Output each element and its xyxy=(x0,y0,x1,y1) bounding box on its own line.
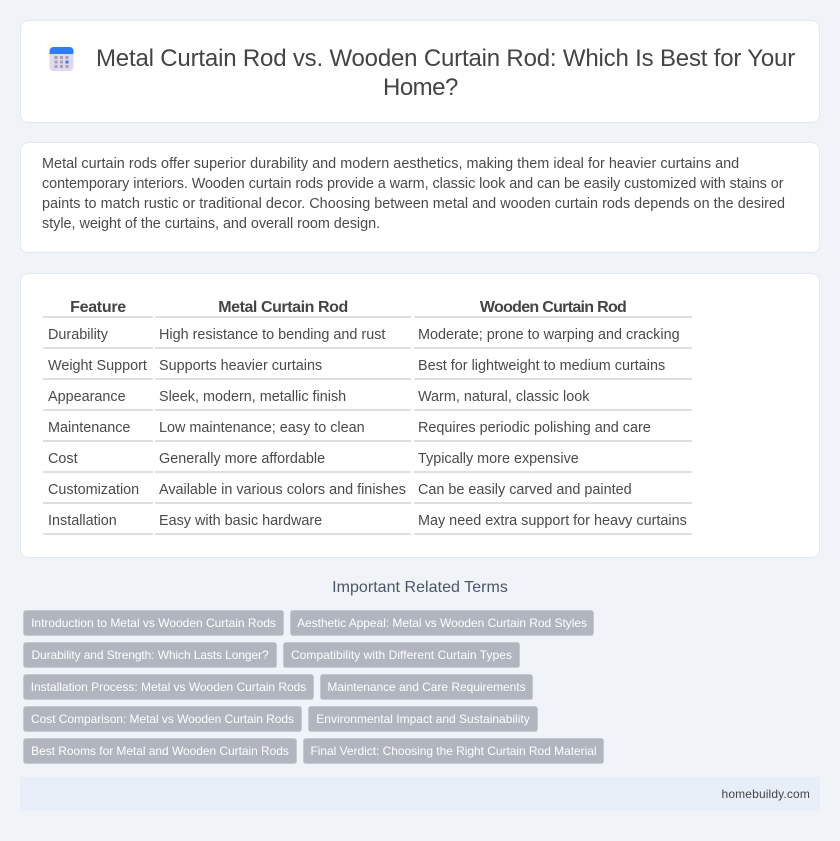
intro text xyxy=(42,156,785,232)
tag: Compatibility with Different Curtain Types xyxy=(291,648,512,662)
tag xyxy=(320,674,533,700)
tag: Installation Process: Metal vs Wooden Curtain Rods xyxy=(31,680,306,694)
intro text: Metal curtain rods offer superior durability and modern aesthetics, making them ideal for heavier curtains and xyxy=(42,156,739,172)
row: maintenance: Low maintenance; easy to clean xyxy=(159,420,365,436)
title: Home? xyxy=(383,74,458,101)
tag xyxy=(290,610,594,636)
tag xyxy=(23,610,284,636)
table header row: Metal Curtain Rod xyxy=(218,299,348,316)
row: customization: Customization xyxy=(48,482,139,498)
tag xyxy=(23,706,302,732)
icon: calendar grid xyxy=(50,47,74,71)
row: durability: Moderate; prone to warping and cracking xyxy=(418,327,680,343)
row: weight support: Supports heavier curtains xyxy=(159,358,322,374)
tag xyxy=(23,642,277,668)
row: customization: Can be easily carved and painted xyxy=(418,482,632,498)
row: weight support: Best for lightweight to medium curtains xyxy=(418,358,665,374)
footer bar xyxy=(20,777,820,811)
tag: Best Rooms for Metal and Wooden Curtain Rods xyxy=(31,744,289,758)
row: cost xyxy=(48,451,579,467)
panel: title header xyxy=(20,20,820,123)
row: maintenance xyxy=(48,420,651,436)
title: Metal Curtain Rod vs. Wooden Curtain Rod: Which Is Best for Your xyxy=(96,45,795,72)
row: cost: Cost xyxy=(48,451,78,467)
tag xyxy=(283,642,520,668)
table header row: Wooden Curtain Rod xyxy=(480,299,626,316)
row: appearance xyxy=(48,389,590,405)
row: durability: Durability xyxy=(48,327,108,343)
row: installation xyxy=(48,513,687,529)
row: appearance: Warm, natural, classic look xyxy=(418,389,589,405)
panel: comparison table xyxy=(20,273,820,558)
heading: important related terms: Important Related Terms xyxy=(332,579,508,596)
row: customization: Available in various colors and finishes xyxy=(159,482,406,498)
row: maintenance: Requires periodic polishing and care xyxy=(418,420,651,436)
row: maintenance: Maintenance xyxy=(48,420,130,436)
tag: Aesthetic Appeal: Metal vs Wooden Curtain Rod Styles xyxy=(297,616,587,630)
tag: Final Verdict: Choosing the Right Curtain Rod Material xyxy=(310,744,596,758)
row: cost: Generally more affordable xyxy=(159,451,325,467)
related term tags xyxy=(23,610,604,764)
row: durability: High resistance to bending and rust xyxy=(159,327,385,343)
footer source text: homebuildy.com xyxy=(722,787,810,801)
tag: Introduction to Metal vs Wooden Curtain Rods xyxy=(31,616,276,630)
tag xyxy=(23,738,297,764)
row: appearance: Sleek, modern, metallic finish xyxy=(159,389,346,405)
row: appearance: Appearance xyxy=(48,389,126,405)
row: weight support xyxy=(48,358,665,374)
tag: Durability and Strength: Which Lasts Longer? xyxy=(31,648,269,662)
table header row: Feature xyxy=(70,299,126,316)
table header row xyxy=(70,299,626,316)
row: cost: Typically more expensive xyxy=(418,451,579,467)
tag: Cost Comparison: Metal vs Wooden Curtain Rods xyxy=(31,712,294,726)
row: weight support: Weight Support xyxy=(48,358,147,374)
tag: Environmental Impact and Sustainability xyxy=(316,712,530,726)
intro text: style, weight of the curtains, and overall room design. xyxy=(42,216,380,232)
row: installation: May need extra support for heavy curtains xyxy=(418,513,687,529)
row: durability xyxy=(48,327,680,343)
row: installation: Easy with basic hardware xyxy=(159,513,322,529)
row: installation: Installation xyxy=(48,513,117,529)
intro text: paints to match rustic or traditional decor. Choosing between metal and wooden curtain rods depends on the desired xyxy=(42,196,785,212)
title xyxy=(96,45,795,101)
intro text: contemporary interiors. Wooden curtain rods provide a warm, classic look and can be easily customized with stains or xyxy=(42,176,783,192)
tag xyxy=(23,674,314,700)
row: customization xyxy=(48,482,632,498)
tag: Maintenance and Care Requirements xyxy=(327,680,526,694)
tag xyxy=(308,706,538,732)
panel: intro paragraph xyxy=(20,142,820,253)
tag xyxy=(303,738,604,764)
